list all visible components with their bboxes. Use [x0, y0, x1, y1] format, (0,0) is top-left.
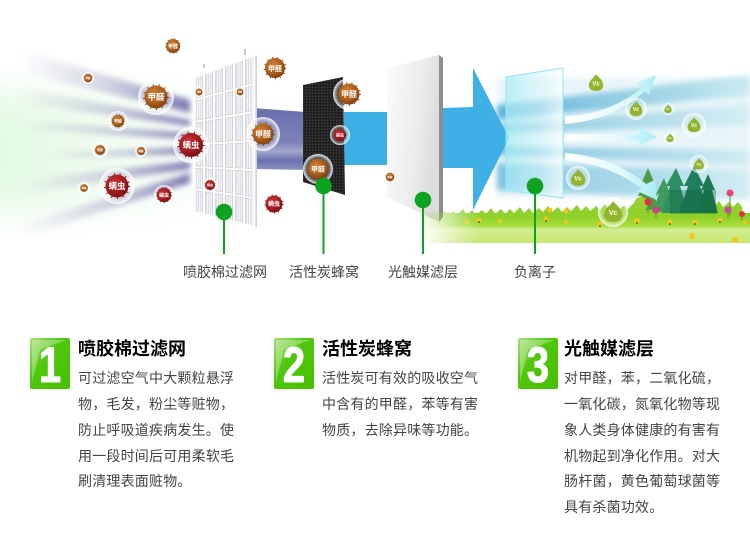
flowers	[644, 190, 745, 220]
negative ion glass panel	[506, 68, 563, 198]
pollutant particles: formaldehyde: 甲醛	[197, 90, 201, 94]
pollutant particles: formaldehyde: 甲醛	[114, 118, 122, 124]
vitamin C leaves: Vc	[609, 210, 617, 217]
text block: 防止呼吸道疾病发生。使	[78, 422, 234, 438]
text block: 肠杆菌，黄色葡萄球菌等	[564, 473, 720, 489]
grass and flowers meadow	[420, 201, 750, 243]
pollutant particles: dust mites: 螨虫	[336, 132, 344, 138]
callout: photocatalyst: 光触媒滤层	[388, 264, 458, 280]
pollutant particles: dust mites: 螨虫	[108, 181, 126, 191]
pollutant particles: formaldehyde: 甲醛	[97, 147, 103, 152]
text block	[564, 370, 720, 515]
text block: 机物起到净化作用。对大	[564, 448, 720, 464]
pollutant particles: dust mites: 螨虫	[159, 192, 169, 199]
vitamin C leaves: Vc	[574, 176, 582, 182]
text block	[322, 370, 478, 438]
big blue arrow	[443, 68, 509, 210]
pollutant particles: formaldehyde: 甲醛	[147, 92, 165, 102]
callout: activated carbon	[289, 178, 359, 280]
filter 3: photocatalyst layer	[387, 55, 443, 222]
text block: 具有杀菌功效。	[564, 499, 663, 515]
callout: photocatalyst	[388, 192, 458, 280]
right blue air glow	[497, 78, 750, 198]
pollutant particles: formaldehyde	[78, 39, 396, 194]
pollutant particles: formaldehyde: 甲醛	[268, 64, 282, 73]
text block: 象人类身体健康的有害有	[564, 422, 720, 438]
callout: negative ions: 负离子	[514, 264, 556, 280]
vitamin C leaves: Vc	[691, 123, 697, 129]
hero air purification diagram	[0, 38, 750, 280]
heading: 光触媒滤层	[564, 339, 654, 359]
text block: 对甲醛，苯，二氧化硫，	[564, 370, 720, 386]
text block: 物，毛发，粉尘等赃物，	[78, 396, 234, 412]
vitamin C leaves: Vc	[666, 107, 670, 111]
text block: 物质，去除异味等功能。	[322, 422, 478, 438]
callout: sprayed cotton mesh	[183, 204, 267, 280]
panel: photocatalyst layer	[518, 338, 720, 515]
purple air band	[252, 108, 306, 170]
heading: 喷胶棉过滤网	[78, 339, 186, 359]
pollutant particles: formaldehyde: 甲醛	[85, 76, 91, 80]
text block: 一氧化碳，氮氧化物等现	[564, 396, 720, 412]
text block: 中含有的甲醛，苯等有害	[322, 396, 478, 412]
pollutant particles: formaldehyde: 甲醛	[81, 186, 87, 190]
polluted air streams	[20, 50, 190, 238]
clean air arrows	[565, 75, 657, 200]
filter 2: activated carbon honeycomb	[303, 77, 345, 195]
blue air band between filters	[344, 112, 390, 165]
pollutant particles: formaldehyde: 甲醛	[255, 129, 271, 139]
trees	[634, 166, 718, 214]
pollutant particles: formaldehyde: 甲醛	[238, 90, 242, 94]
callout: negative ions	[514, 178, 556, 280]
pollutant particles: formaldehyde: 甲醛	[341, 89, 357, 99]
vitamin C leaves: Vc	[633, 107, 639, 113]
callout: sprayed cotton mesh: 喷胶棉过滤网	[183, 264, 267, 280]
icon: number 1	[30, 338, 70, 389]
panel: activated carbon honeycomb	[274, 338, 478, 438]
vitamin C leaves: Vc	[668, 136, 672, 140]
text block	[78, 370, 234, 489]
filter 1: sprayed cotton mesh	[194, 49, 257, 227]
pollutant particles: dust mites: 螨虫	[268, 200, 280, 208]
text block: 刷清理表面赃物。	[78, 473, 192, 489]
blue air streams on the right	[497, 75, 750, 200]
text block: 用一段时间后可用柔软毛	[78, 448, 234, 464]
pollutant particles: formaldehyde: 甲醛	[311, 164, 325, 174]
left mint air glow	[0, 92, 260, 210]
text block: 活性炭可有效的吸收空气	[322, 370, 478, 386]
heading: 活性炭蜂窝	[322, 339, 412, 359]
pollutant particles: formaldehyde: 甲醛	[138, 149, 144, 153]
vitamin C leaves	[566, 74, 708, 227]
vitamin C leaves: Vc	[592, 82, 600, 88]
text block: 可过滤空气中大颗粒悬浮	[78, 370, 234, 386]
icon: number 3	[518, 338, 558, 389]
pollutant particles: dust mites	[99, 125, 350, 213]
pollutant particles: dust mites: 螨虫	[207, 182, 213, 187]
panel: sprayed cotton mesh	[30, 338, 234, 489]
icon: number 2	[274, 338, 314, 389]
pollutant particles: formaldehyde: 甲醛	[168, 43, 178, 50]
pollutant particles: formaldehyde: 甲醛	[387, 175, 393, 179]
pollutant particles: dust mites: 螨虫	[182, 140, 200, 150]
vitamin C leaves: Vc	[697, 162, 702, 166]
callout: activated carbon: 活性炭蜂窝	[289, 264, 359, 280]
